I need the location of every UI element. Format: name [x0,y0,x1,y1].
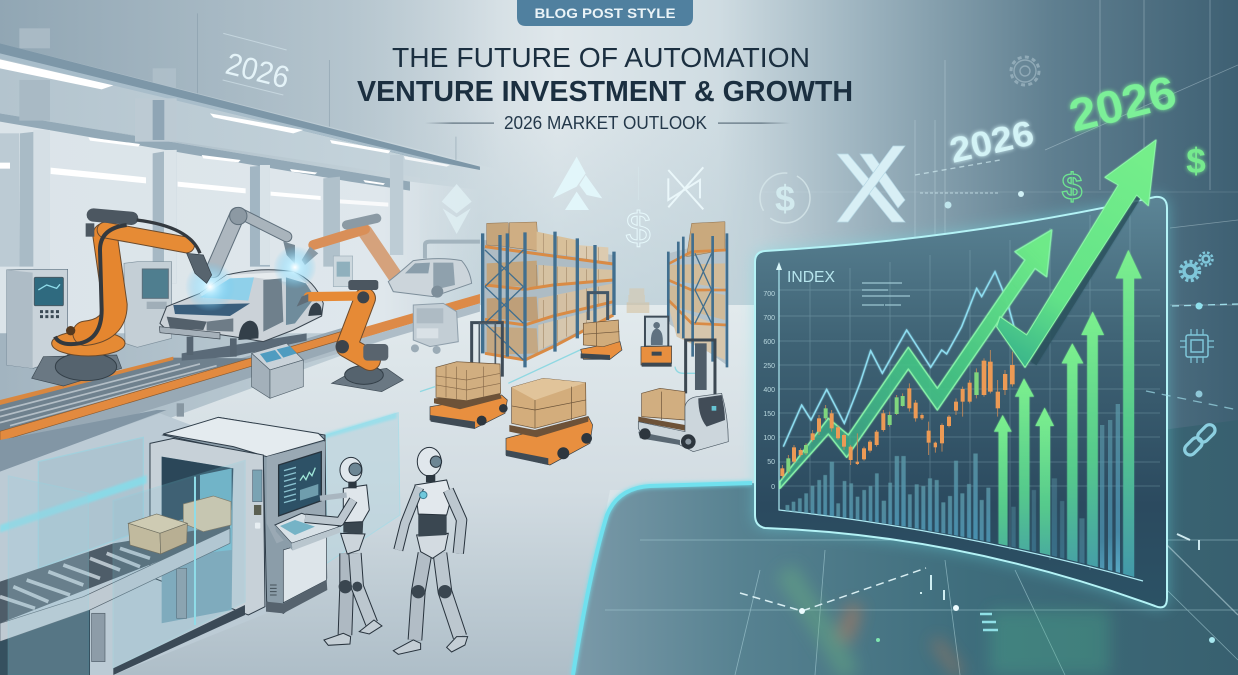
AGV with pallet centre [506,378,593,465]
floor holo marks [740,568,1215,643]
floor [0,305,770,675]
AGV with pallet left [430,323,508,429]
icon: chip [1180,329,1214,363]
frame below main conveyor [0,410,167,472]
y axis labels: 0 [771,484,775,491]
top icons row [442,157,703,253]
icon: dollar outline: $ [626,202,651,253]
keyboard console [275,513,340,551]
panel: factory line [0,207,480,457]
label: 2026 pale: 2026 [946,114,1038,171]
icon: large X mark [837,146,905,222]
subtitle: 2026 MARKET OUTLOOK [504,113,707,133]
panel: inspection station [0,410,468,675]
chart reflection [785,570,1110,675]
icon: dollar solid green: $ [1186,142,1206,181]
cabinet: left console [7,269,68,368]
conveyor [0,327,347,457]
icon: triangles [553,157,602,210]
legend lines [862,283,910,305]
background grid right [760,0,1238,305]
icon: gears [1180,252,1212,280]
humanoid robot operator [305,457,382,645]
heading: INDEX: INDEX [787,269,835,286]
data dashes and dots [915,160,1238,615]
vertical green arrows [994,250,1142,607]
glass wall right [325,413,400,563]
thin blue line [783,272,1025,447]
panel: index chart display [755,140,1167,618]
icon: diamond [442,184,472,234]
terminal box [252,343,303,398]
AGV rear with boxes [581,293,622,360]
icon: welded car body [159,270,323,342]
badge: BLOG POST STYLE [534,5,676,21]
volume bars [786,404,1120,574]
roller conveyor [0,525,230,675]
y axis labels: 50 [767,459,775,466]
label: 2026 green: 2026 [1064,66,1181,142]
glass wall rear [0,437,147,568]
y axis labels [763,291,775,491]
humanoid robot standing [393,447,468,654]
shelf: left rack [483,222,615,367]
y axis labels: 100 [763,435,775,442]
icon: gear outline [1011,57,1039,85]
panel: holographic floor [573,420,1238,675]
badge [517,0,693,26]
icon: thin X [668,167,703,209]
icon: dollar circle: $ [775,178,795,219]
y axis labels: 250 [763,363,775,370]
title [357,42,853,108]
icon: front orange robot [297,280,403,392]
panel: warehouse [420,222,728,465]
axis [776,262,1143,581]
y axis labels: 600 [763,339,775,346]
floating box stack [627,288,649,313]
wall label: faint 2026: 2026 [222,46,293,95]
y axis labels: 700 [763,315,775,322]
far cart [411,303,458,354]
monitor [279,452,321,516]
AGV white with mast [638,340,728,452]
floor guide lines [420,350,703,392]
shelf: right rack [668,222,727,367]
forklift with operator [641,317,672,367]
right side icons [760,57,1238,615]
cabinet: rear console [124,262,172,347]
machine body [150,417,327,623]
icon: dollar circle [760,173,810,223]
big growth arrow [997,140,1156,367]
welding sparks [185,246,317,312]
boxes on conveyor [128,496,231,554]
title: VENTURE INVESTMENT & GROWTH [357,76,853,108]
y axis labels: 700 [763,291,775,298]
candlesticks [780,350,1015,478]
y axis labels: 150 [763,411,775,418]
far car [388,242,480,298]
glass wall front [8,461,245,675]
far conveyor [297,294,480,357]
icon: link [1182,422,1217,457]
title: THE FUTURE OF AUTOMATION [392,42,810,73]
icon: main orange robot [32,215,212,386]
icon: dollar outline green: $ [1062,166,1083,207]
icon: distant orange robot [302,218,397,278]
y axis labels: 400 [763,387,775,394]
panel: factory ceiling and wall [0,0,500,333]
icon: grey robot [213,207,295,270]
growth arrow band [780,230,1052,488]
backdrop wall of station [0,413,267,675]
